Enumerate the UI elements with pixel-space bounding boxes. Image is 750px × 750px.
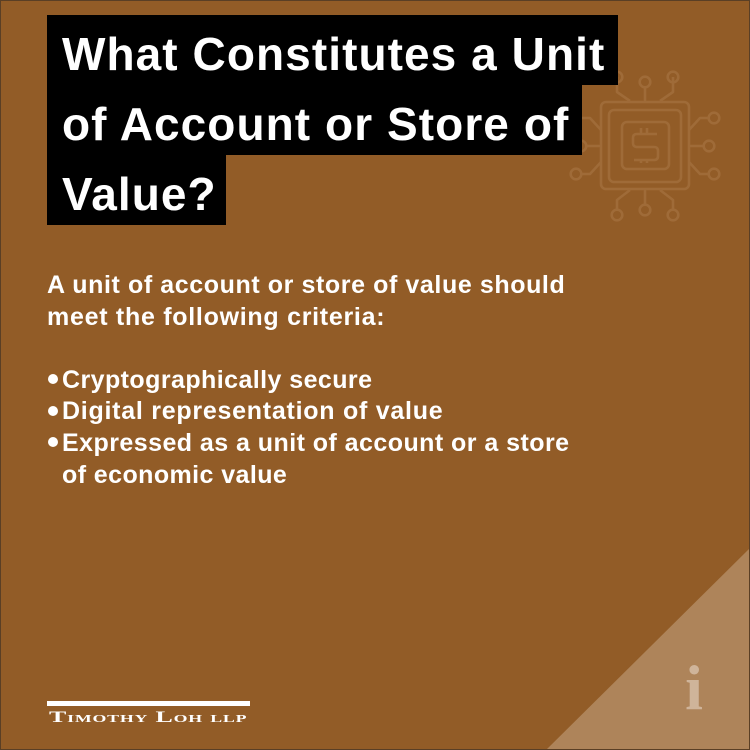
criteria list: Digital representation of value — [62, 397, 443, 425]
corner triangle — [547, 549, 749, 749]
criteria list: Cryptographically secure — [62, 366, 372, 394]
icon: info: i — [685, 652, 703, 723]
title: of Account or Store of — [62, 98, 569, 150]
logo text: Timothy Loh llp — [49, 709, 247, 726]
intro text: meet the following criteria: — [47, 303, 385, 331]
criteria list: of economic value — [62, 461, 287, 489]
title: Value? — [62, 168, 217, 220]
title — [47, 15, 618, 225]
intro text — [47, 271, 565, 331]
criteria list — [48, 366, 570, 489]
title: What Constitutes a Unit — [62, 28, 605, 80]
intro text: A unit of account or store of value should — [47, 271, 565, 299]
criteria list: Expressed as a unit of account or a store — [62, 429, 570, 457]
logo rule — [47, 701, 250, 706]
